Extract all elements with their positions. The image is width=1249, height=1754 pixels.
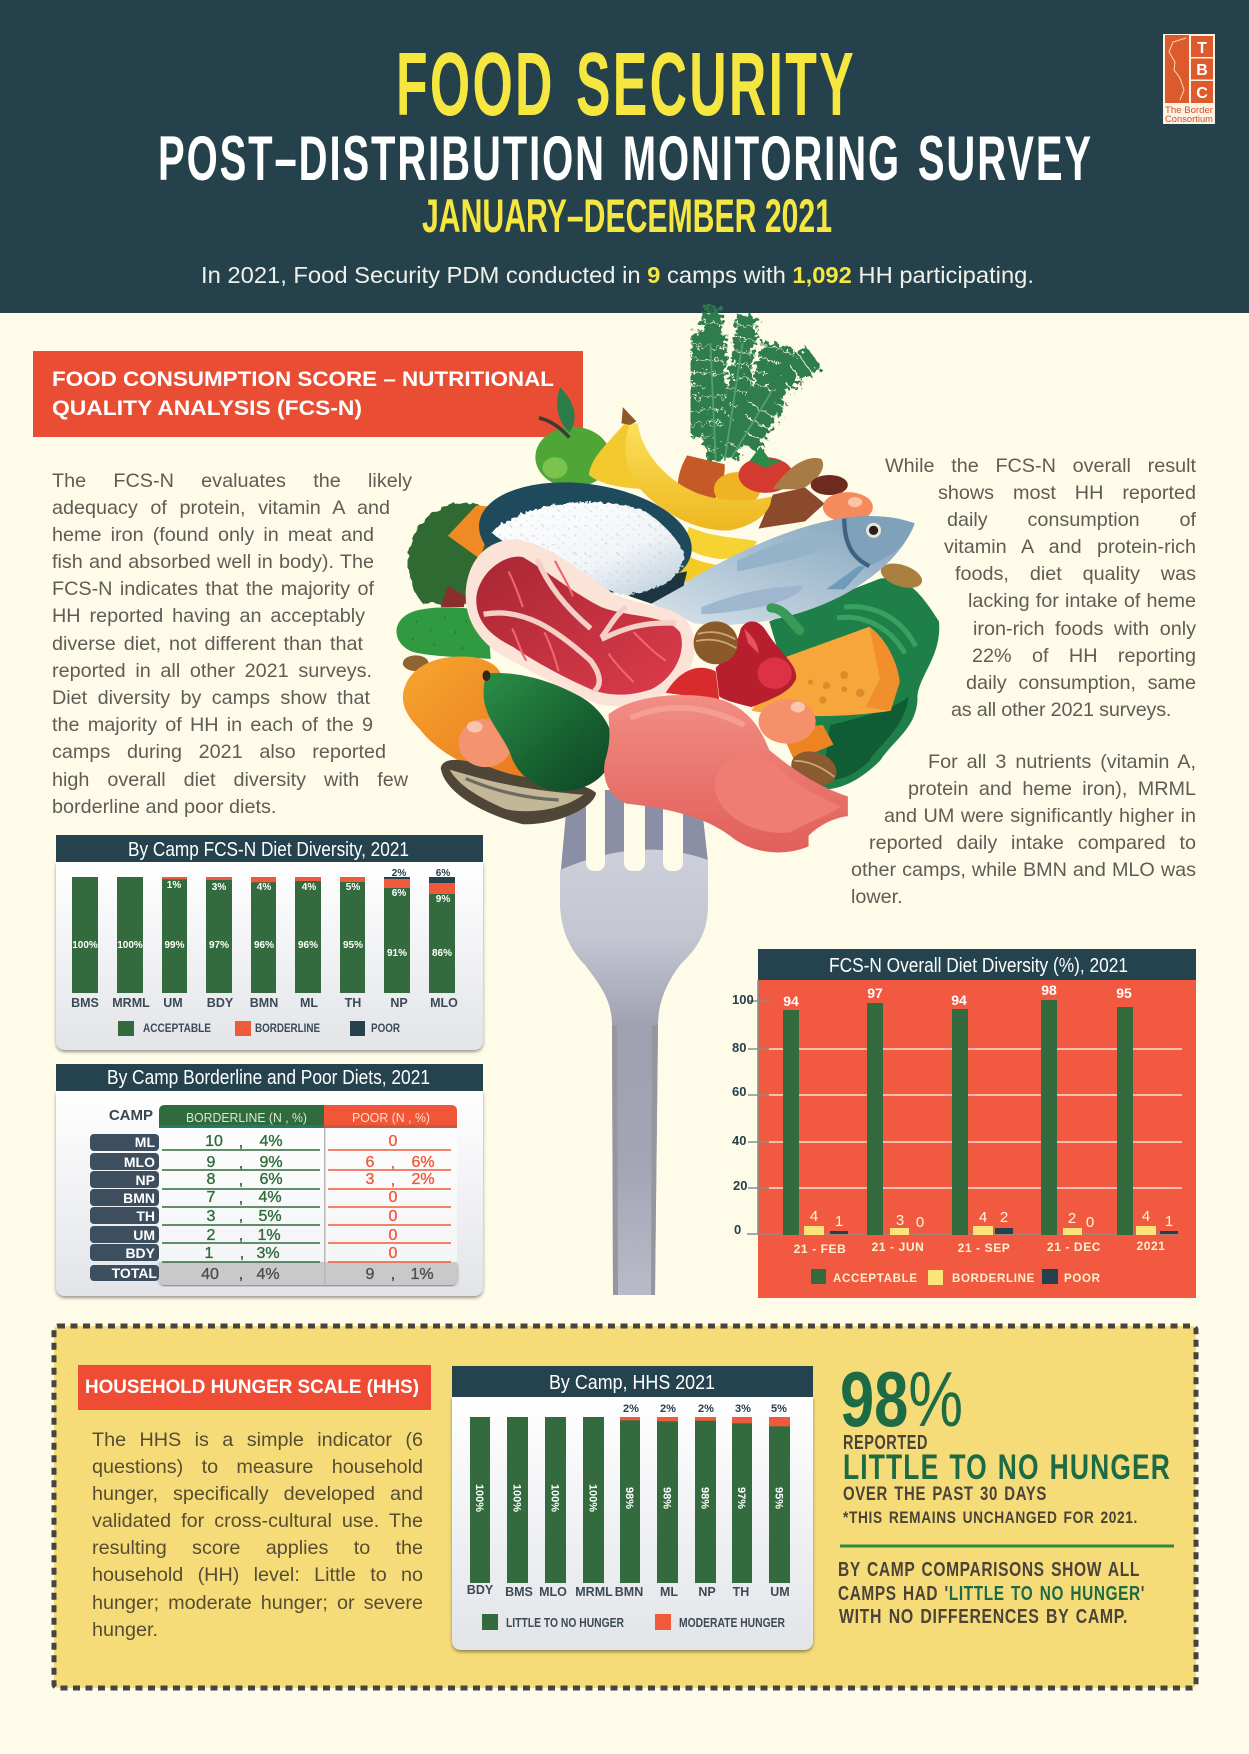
y axis: 40: [732, 1133, 746, 1148]
column heading: poor: [324, 1105, 457, 1128]
borderline values: ,: [239, 1190, 243, 1207]
camp axis labels: [467, 1583, 790, 1599]
rotated value labels: 100%: [548, 1484, 560, 1512]
x axis labels: 2021: [1136, 1239, 1166, 1253]
bar value labels: 100%: [117, 940, 143, 951]
camp row labels: BDY: [125, 1245, 156, 1261]
camp row labels: ML: [135, 1134, 155, 1150]
bar value labels: [783, 982, 1173, 1231]
bar value labels: 96%: [254, 940, 274, 951]
bar value labels: [72, 868, 452, 959]
logo: The Border Consortium: [1163, 34, 1215, 125]
bar value labels: 4: [1142, 1208, 1150, 1225]
logo: The Border Consortium: B: [1196, 62, 1208, 79]
bar value labels: 94: [951, 992, 967, 1008]
camp axis labels: NP: [698, 1585, 716, 1599]
icon: chicken meat: [604, 695, 848, 852]
bar value labels: 4%: [302, 882, 316, 893]
rotated value labels: 97%: [735, 1487, 747, 1509]
borderline values: 3%: [256, 1245, 280, 1262]
top value labels: 2%: [623, 1403, 639, 1415]
borderline values: 9: [207, 1154, 216, 1171]
x axis labels: 21 - FEB: [794, 1242, 846, 1256]
y axis: 20: [733, 1178, 747, 1193]
legend: LITTLE TO NO HUNGER: [506, 1616, 624, 1630]
icon: strawberry: [739, 446, 793, 493]
text block: FCS-N explanation: The FCS-N evaluates the likely: [52, 470, 412, 492]
camp comparison note: BY CAMP COMPARISONS SHOW ALL: [838, 1559, 1140, 1581]
borderline values: ,: [239, 1227, 243, 1244]
section heading: FCS-N: FOOD CONSUMPTION SCORE – NUTRITIONAL: [52, 367, 554, 391]
chart: By Camp FCS-N Diet Diversity: [56, 835, 483, 1050]
rotated value labels: 100%: [473, 1484, 485, 1512]
rotated value labels: 98%: [660, 1487, 672, 1509]
column heading: camp: CAMP: [109, 1107, 153, 1124]
icon: steak: [466, 539, 695, 706]
intro sentence: In 2021, Food Security PDM conducted in 9 camps with 1,092 HH participating.: [201, 262, 1034, 288]
legend: [118, 1021, 401, 1036]
camp axis labels: MRML: [575, 1585, 613, 1599]
text block: FCS-N explanation: FCS-N indicates that the majority of: [52, 578, 374, 600]
borderline values: 10: [205, 1133, 223, 1150]
top value labels: 5%: [771, 1403, 787, 1415]
text block: HHS explanation: hunger.: [92, 1619, 158, 1641]
camp axis labels: BMN: [250, 996, 278, 1010]
text block: FCS-N explanation: reported in all other 2021 surveys.: [52, 660, 372, 682]
camp axis labels: BDY: [207, 996, 234, 1010]
icon: green stem: [771, 608, 800, 630]
camp comparison note: WITH NO DIFFERENCES BY CAMP.: [839, 1606, 1128, 1628]
bar value labels: 3: [896, 1212, 904, 1229]
text block: overall result: lacking for intake of heme: [968, 590, 1196, 612]
icon: carrot: [678, 455, 725, 501]
icon: rice bowl: [472, 470, 699, 605]
column heading: borderline: [159, 1105, 324, 1128]
bar value labels: 97: [867, 985, 883, 1001]
poor values: 0: [389, 1208, 398, 1225]
text block: HHS explanation: The HHS is a simple indicator (6: [92, 1428, 423, 1450]
borderline values: ,: [239, 1266, 243, 1283]
text block: FCS-N explanation: the majority of HH in each of the 9: [52, 714, 373, 736]
bar value labels: 2%: [392, 868, 406, 879]
camp axis labels: MLO: [430, 996, 458, 1010]
poor values: [328, 1133, 451, 1283]
legend: BORDERLINE: [952, 1273, 1035, 1285]
panel: Household Hunger Scale: [54, 1326, 1196, 1688]
bar value labels: 86%: [432, 948, 452, 959]
bar value labels: 98: [1041, 982, 1057, 998]
rotated value labels: 100%: [586, 1484, 598, 1512]
bar value labels: 2: [1068, 1210, 1076, 1227]
camp row labels: MLO: [124, 1154, 155, 1170]
logo: The Border Consortium: T: [1197, 40, 1207, 57]
camp axis labels: BMS: [505, 1585, 533, 1599]
heading: HHS: HOUSEHOLD HUNGER SCALE (HHS): [85, 1377, 419, 1398]
text block: FCS-N explanation: [52, 470, 412, 818]
rotated value labels: 95%: [772, 1487, 784, 1509]
text block: HHS explanation: hunger, specifically developed and: [92, 1483, 423, 1505]
chart: FCS-N Overall Diet Diversity: [732, 949, 1196, 1298]
text block: overall result: as all other 2021 surveys.: [951, 699, 1171, 721]
icon: mango: [403, 656, 530, 779]
text block: overall result: shows most HH reported: [938, 482, 1196, 504]
y axis: 80: [732, 1040, 746, 1055]
bar value labels: 4: [979, 1209, 987, 1226]
text block: HHS explanation: household (HH) level: Little to no: [92, 1564, 423, 1586]
legend: ACCEPTABLE: [833, 1273, 918, 1285]
camp row labels: TH: [136, 1208, 155, 1224]
bar value labels: 97%: [209, 940, 229, 951]
dark bars: poor: [830, 1228, 1178, 1234]
camp axis labels: MRML: [112, 996, 150, 1010]
borderline values: 3: [207, 1208, 216, 1225]
bar value labels: 6%: [392, 888, 406, 899]
borderline values: ,: [239, 1155, 243, 1172]
icon: bananas: [589, 407, 771, 584]
x axis labels: 21 - DEC: [1047, 1240, 1101, 1254]
text block: nutrient comparison: and UM were significantly higher in: [884, 805, 1196, 827]
camp row labels: NP: [136, 1172, 155, 1188]
bar value labels: 4: [810, 1208, 818, 1225]
text block: nutrient comparison: lower.: [851, 886, 903, 908]
stat caption: [843, 1432, 1171, 1527]
bar value labels: 100%: [72, 940, 98, 951]
stat caption: *THIS REMAINS UNCHANGED FOR 2021.: [843, 1508, 1138, 1527]
poor values: 9: [366, 1266, 375, 1283]
text block: overall result: foods, diet quality was: [955, 563, 1196, 585]
bar value labels: 0: [916, 1214, 924, 1231]
borderline values: 2: [207, 1227, 216, 1244]
icon: broccoli: [409, 503, 496, 607]
text block: nutrient comparison: For all 3 nutrients (vitamin A,: [928, 750, 1196, 772]
text block: HHS explanation: resulting score applies to the: [92, 1537, 423, 1559]
stat caption: OVER THE PAST 30 DAYS: [843, 1484, 1047, 1505]
top value labels: 2%: [660, 1403, 676, 1415]
poor values: 2%: [411, 1171, 435, 1188]
key stat: 98%: 98%: [840, 1355, 963, 1443]
poor values: 3: [366, 1171, 375, 1188]
bar value labels: 1: [1165, 1213, 1173, 1230]
borderline values: ,: [240, 1245, 244, 1262]
y axis: 100: [732, 992, 754, 1007]
header band: [0, 0, 1249, 313]
text block: overall result: [885, 454, 1196, 721]
bar value labels: 91%: [387, 948, 407, 959]
text block: nutrient comparison: reported daily intake compared to: [869, 832, 1196, 854]
borderline values: 4%: [258, 1189, 282, 1206]
camp row labels: [90, 1134, 159, 1281]
text block: HHS explanation: hunger; moderate hunger; or severe: [92, 1592, 423, 1614]
icon: cheese: [751, 627, 900, 716]
y axis: 0: [734, 1222, 741, 1237]
green bars: acceptable: [783, 1000, 1133, 1235]
borderline values: 8: [207, 1171, 216, 1188]
text block: nutrient comparison: other camps, while BMN and MLO was: [851, 859, 1196, 881]
date range: JANUARY–DECEMBER 2021: [422, 189, 832, 242]
bar value labels: 3%: [212, 882, 226, 893]
bar value labels: 4%: [257, 882, 271, 893]
camp axis labels: ML: [300, 996, 318, 1010]
divider rule: [840, 1544, 1174, 1548]
yellow bars: borderline: [804, 1226, 1156, 1235]
icon: red pepper: [716, 621, 796, 707]
fork: [560, 780, 708, 1295]
icon: orange wedge: [780, 725, 834, 761]
column heading: borderline: BORDERLINE (N , %): [186, 1110, 307, 1125]
stat caption: REPORTED: [843, 1432, 928, 1454]
bar value labels: 95%: [343, 940, 363, 951]
icon: nuts and dates: [759, 458, 848, 529]
camp axis labels: TH: [345, 996, 361, 1010]
camp axis labels: TH: [733, 1585, 749, 1599]
icon: green apple: [535, 387, 610, 487]
legend: POOR: [1064, 1273, 1101, 1285]
borderline values: 9%: [259, 1154, 283, 1171]
borderline values: ,: [239, 1208, 243, 1225]
camp axis labels: BDY: [467, 1583, 494, 1597]
poor values: 6%: [411, 1154, 435, 1171]
borderline values: 4%: [256, 1266, 280, 1283]
icon: salmon ball right: [759, 699, 816, 744]
text block: FCS-N explanation: HH reported having an acceptably: [52, 605, 365, 627]
text block: HHS explanation: questions) to measure household: [92, 1456, 423, 1478]
camp axis labels: BMN: [615, 1585, 643, 1599]
section heading: FCS-N: QUALITY ANALYSIS (FCS-N): [52, 396, 362, 420]
y axis: [732, 980, 1178, 1237]
icon: carrot green stems: [710, 343, 773, 461]
text block: overall result: vitamin A and protein-rich: [944, 536, 1196, 558]
rotated value labels: 98%: [698, 1487, 710, 1509]
borderline values: 7: [207, 1189, 216, 1206]
chart: FCS-N Overall Diet Diversity: FCS-N Overall Diet Diversity (%), 2021: [829, 955, 1128, 977]
logo: The Border Consortium: C: [1196, 85, 1208, 102]
text block: FCS-N explanation: high overall diet diversity with few: [52, 769, 408, 791]
camp axis labels: UM: [770, 1585, 790, 1599]
y axis: 60: [732, 1084, 746, 1099]
bar value labels: 96%: [298, 940, 318, 951]
poor values: 0: [389, 1133, 398, 1150]
bar value labels: 2: [1000, 1209, 1008, 1226]
text block: nutrient comparison: [851, 750, 1196, 908]
borderline values: 1%: [257, 1227, 281, 1244]
rotated value labels: 100%: [510, 1484, 522, 1512]
column heading: poor: POOR (N , %): [352, 1110, 430, 1125]
icon: almond: [787, 746, 841, 791]
chart: By Camp FCS-N Diet Diversity: By Camp FCS-N Diet Diversity, 2021: [128, 839, 409, 861]
text block: FCS-N explanation: heme iron (found only in meat and: [52, 524, 374, 546]
bar value labels: 9%: [436, 894, 450, 905]
icon: carrot greens: [707, 305, 814, 461]
camp row labels: TOTAL: [112, 1265, 157, 1281]
legend: BORDERLINE: [255, 1023, 320, 1035]
icon: oyster: [441, 760, 596, 824]
icon: salmon ball left: [459, 719, 512, 767]
legend: MODERATE HUNGER: [679, 1616, 785, 1630]
camp comparison note: [838, 1559, 1145, 1628]
poor values: 0: [389, 1245, 398, 1262]
icon: avocado: [482, 670, 613, 791]
x axis labels: [794, 1239, 1166, 1256]
legend: [482, 1614, 785, 1630]
camp axis labels: BMS: [71, 996, 99, 1010]
text block: FCS-N explanation: camps during 2021 also reported: [52, 741, 386, 763]
icon: lemon: [714, 472, 760, 506]
icon: salmon ball: [823, 492, 873, 522]
icon: fish: [651, 516, 915, 625]
stacked bars: [72, 877, 455, 993]
title: FOOD SECURITY: [396, 35, 856, 135]
borderline values: 1: [205, 1245, 214, 1262]
rotated value labels: [473, 1484, 784, 1512]
poor values: 0: [389, 1227, 398, 1244]
poor values: 6: [366, 1154, 375, 1171]
borderline values: ,: [239, 1172, 243, 1189]
icon: walnut: [694, 621, 738, 664]
camp axis labels: NP: [390, 996, 408, 1010]
bar value labels: 99%: [164, 940, 185, 951]
legend: ACCEPTABLE: [143, 1023, 211, 1035]
text block: nutrient comparison: protein and heme iron), MRML: [908, 778, 1196, 800]
text block: overall result: While the FCS-N overall result: [885, 454, 1196, 476]
gridlines: [769, 1049, 1182, 1188]
table: By Camp Borderline and Poor Diets: By Camp Borderline and Poor Diets, 2021: [107, 1067, 430, 1089]
icon: red tomato: [666, 668, 719, 700]
text block: overall result: iron-rich foods with only: [973, 618, 1196, 640]
top value labels: [623, 1403, 787, 1415]
camp axis labels: [71, 996, 458, 1010]
borderline values: 40: [201, 1266, 219, 1283]
legend: POOR: [371, 1023, 401, 1035]
poor values: 0: [389, 1189, 398, 1206]
text block: FCS-N explanation: Diet diversity by camps show that: [52, 687, 370, 709]
borderline values: 4%: [259, 1133, 283, 1150]
icon: cucumber: [396, 607, 491, 659]
text block: FCS-N explanation: adequacy of protein, vitamin A and: [52, 497, 390, 519]
text block: FCS-N explanation: diverse diet, not different than that: [52, 633, 363, 655]
borderline values: [162, 1133, 320, 1283]
bar value labels: 5%: [346, 882, 360, 893]
camp row labels: BMN: [123, 1190, 155, 1206]
camp axis labels: ML: [660, 1585, 678, 1599]
text block: overall result: daily consumption, same: [966, 672, 1196, 694]
poor values: ,: [391, 1266, 395, 1283]
logo: The Border Consortium: Consortium: [1165, 114, 1213, 125]
camp axis labels: MLO: [539, 1585, 567, 1599]
illustration: food on the fork: [396, 305, 939, 852]
x axis labels: 21 - SEP: [958, 1241, 1010, 1255]
table body: [159, 1128, 457, 1285]
borderline values: ,: [239, 1134, 243, 1151]
bar value labels: 95: [1116, 985, 1132, 1001]
rotated value labels: 98%: [623, 1487, 635, 1509]
table: By Camp Borderline and Poor Diets: [56, 1064, 483, 1296]
bar value labels: 1: [835, 1213, 843, 1230]
icon: small peanut: [403, 655, 429, 671]
x axis labels: 21 - JUN: [872, 1240, 924, 1254]
poor values: ,: [391, 1172, 395, 1189]
bar value labels: 94: [783, 993, 799, 1009]
top value labels: 2%: [698, 1403, 714, 1415]
borderline values: 5%: [258, 1208, 282, 1225]
camp comparison note: CAMPS HAD 'LITTLE TO NO HUNGER': [838, 1583, 1145, 1605]
camp row labels: UM: [133, 1227, 155, 1243]
borderline values: 6%: [259, 1171, 283, 1188]
text block: HHS explanation: [92, 1428, 423, 1641]
chart: By Camp HHS 2021: By Camp, HHS 2021: [549, 1372, 715, 1394]
heading: HHS: [78, 1365, 431, 1410]
legend: [811, 1269, 1101, 1285]
poor values: 1%: [410, 1266, 434, 1283]
text block: overall result: 22% of HH reporting: [972, 645, 1196, 667]
poor values: ,: [391, 1155, 395, 1172]
camp axis labels: UM: [163, 996, 183, 1010]
icon: leafy greens: [769, 578, 939, 789]
top value labels: 3%: [735, 1403, 751, 1415]
section heading: FCS-N: [33, 351, 583, 437]
logo: The Border Consortium: The Border: [1165, 105, 1213, 116]
text block: FCS-N explanation: borderline and poor diets.: [52, 796, 276, 818]
bar value labels: 1%: [167, 880, 181, 891]
bar value labels: 0: [1086, 1214, 1094, 1231]
text block: FCS-N explanation: fish and absorbed well in body). The: [52, 551, 374, 573]
icon: peanut: [878, 559, 925, 593]
text block: overall result: daily consumption of: [947, 509, 1196, 531]
text block: HHS explanation: validated for cross-cultural use. The: [92, 1510, 423, 1532]
chart: By Camp HHS 2021: [452, 1366, 813, 1650]
stacked bars: [470, 1417, 790, 1583]
bar value labels: 6%: [436, 868, 450, 879]
